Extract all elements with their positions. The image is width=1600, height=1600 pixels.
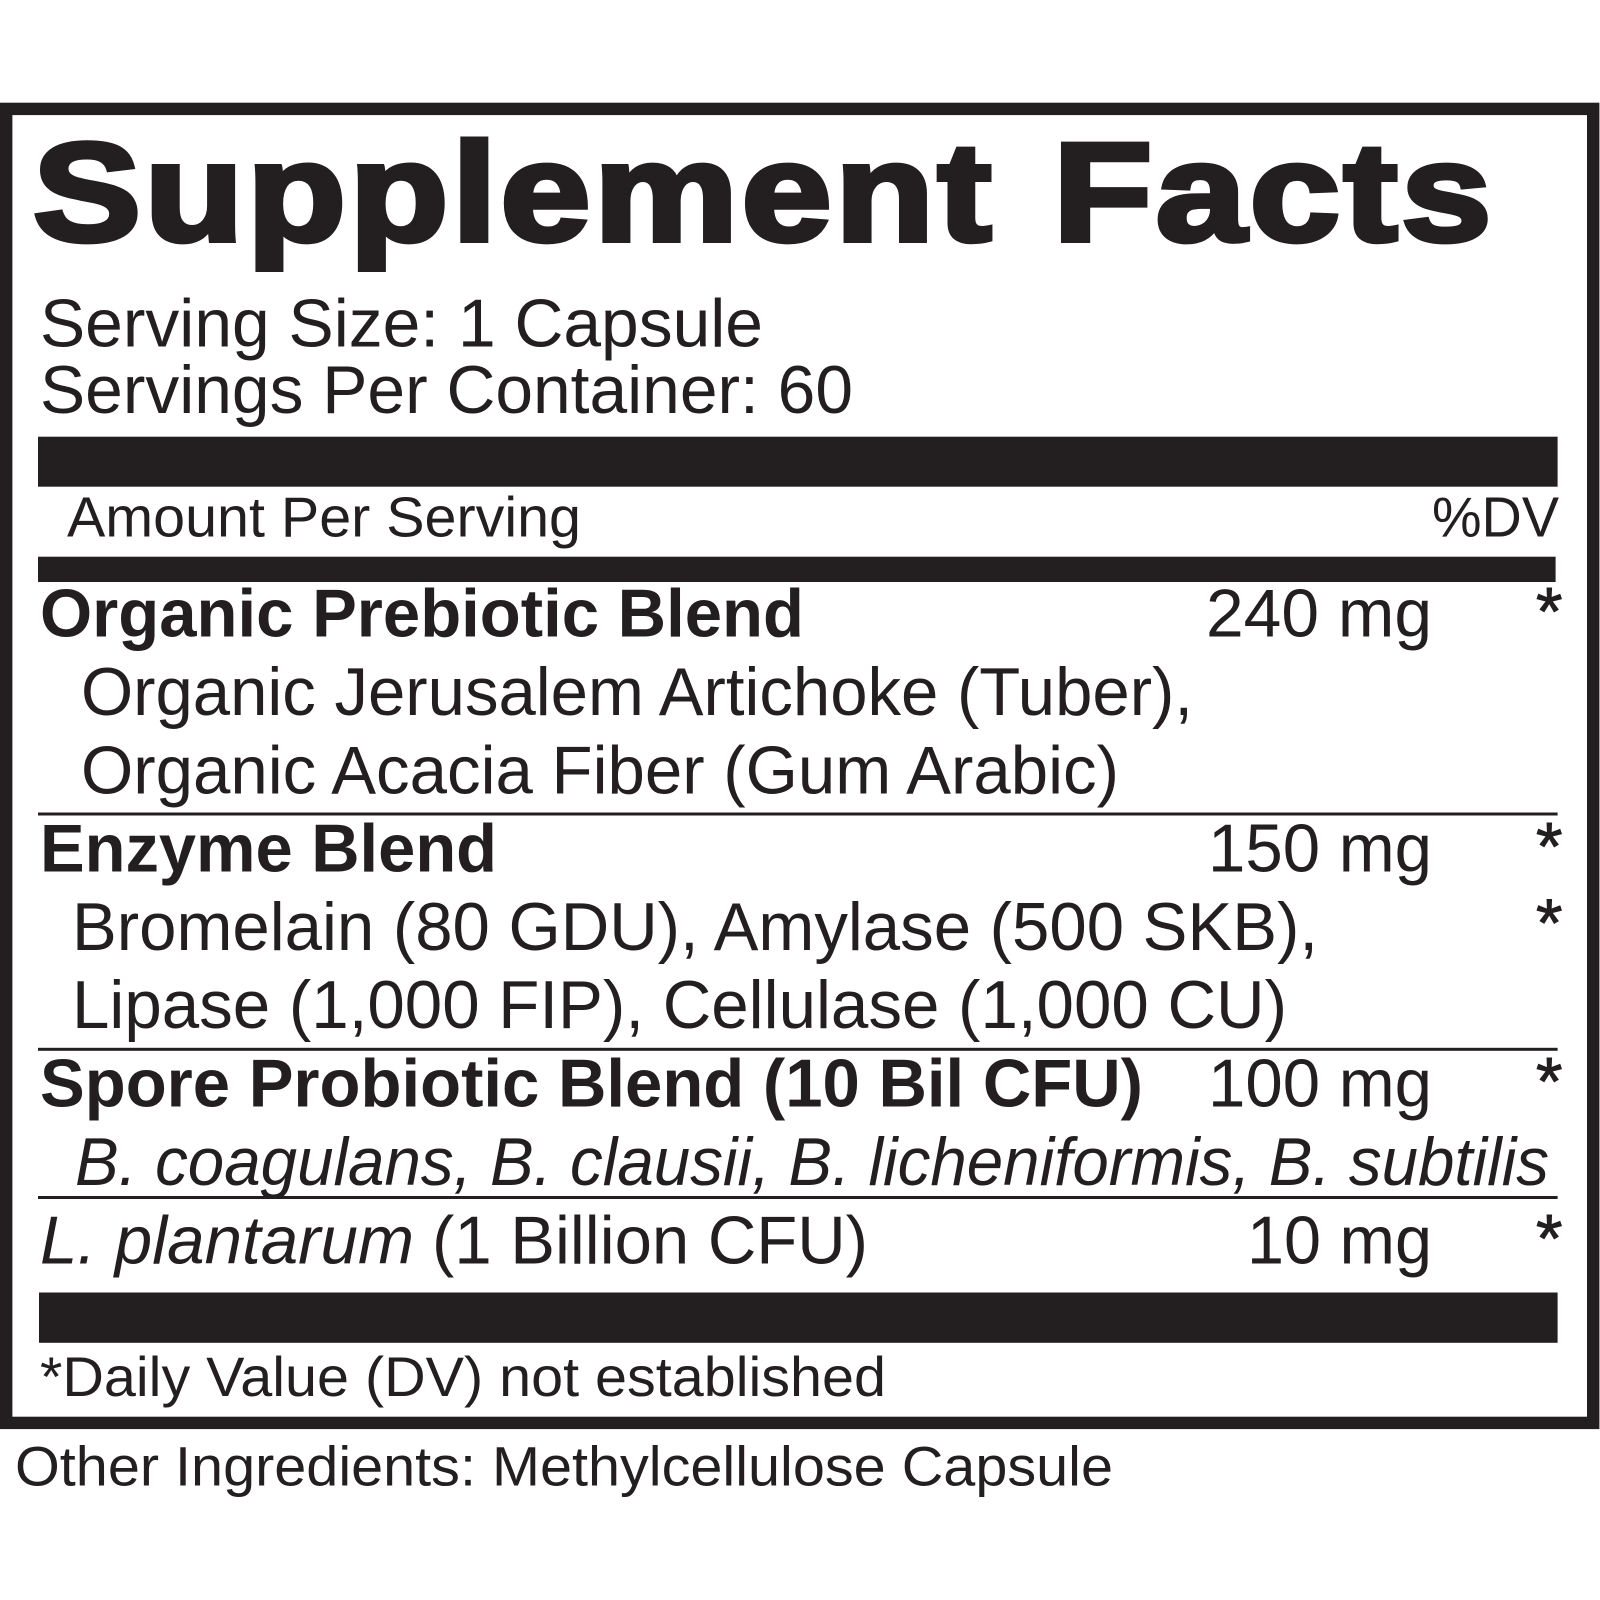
ingredient row: l. plantarum [40,1200,1562,1278]
ingredient row: spore probiotic blend [40,1044,1562,1200]
title: Supplement [33,114,995,270]
component asterisk: * [1536,885,1562,961]
ingredient row: enzyme blend [40,809,1562,1043]
daily value asterisk: * [1536,809,1562,885]
components line 2: Organic Acacia Fiber (Gum Arabic) [81,732,1119,808]
species: B. coagulans, B. clausii, B. licheniformis, B. subtilis [75,1124,1549,1200]
thick bar: header [38,557,1556,582]
amount: 10 mg [1247,1202,1432,1278]
title: Facts [1053,114,1495,270]
column headers [67,486,1559,550]
servings per container: Servings Per Container: 60 [40,352,853,428]
ingredient row: organic prebiotic blend [40,574,1562,808]
components line 2: Lipase (1,000 FIP), Cellulase (1,000 CU) [72,967,1287,1043]
amount: 240 mg [1206,576,1432,652]
amount: 150 mg [1208,811,1432,887]
thick bar: bottom [39,1292,1558,1343]
serving size: Serving Size: 1 Capsule [40,286,763,362]
percent daily value: %DV [1432,486,1559,550]
thick bar: top [38,437,1558,487]
amount per serving: Amount Per Serving [67,486,581,550]
daily value asterisk: * [1536,574,1562,650]
components line 1: Organic Jerusalem Artichoke (Tuber), [81,654,1193,730]
amount: 100 mg [1208,1046,1432,1122]
name: Organic Prebiotic Blend [40,576,804,652]
daily value asterisk: * [1536,1044,1562,1120]
daily value asterisk: * [1536,1200,1562,1276]
title [33,114,1495,270]
species name: L. plantarum [40,1202,414,1278]
count: (1 Billion CFU) [432,1202,868,1278]
serving info [40,286,853,428]
name: Enzyme Blend [40,811,497,887]
footnote: *Daily Value (DV) not established [40,1345,886,1408]
other ingredients: Other Ingredients: Methylcellulose Capsule [15,1435,1113,1498]
name: Spore Probiotic Blend (10 Bil CFU) [40,1046,1143,1122]
components line 1: Bromelain (80 GDU), Amylase (500 SKB), [72,889,1318,965]
